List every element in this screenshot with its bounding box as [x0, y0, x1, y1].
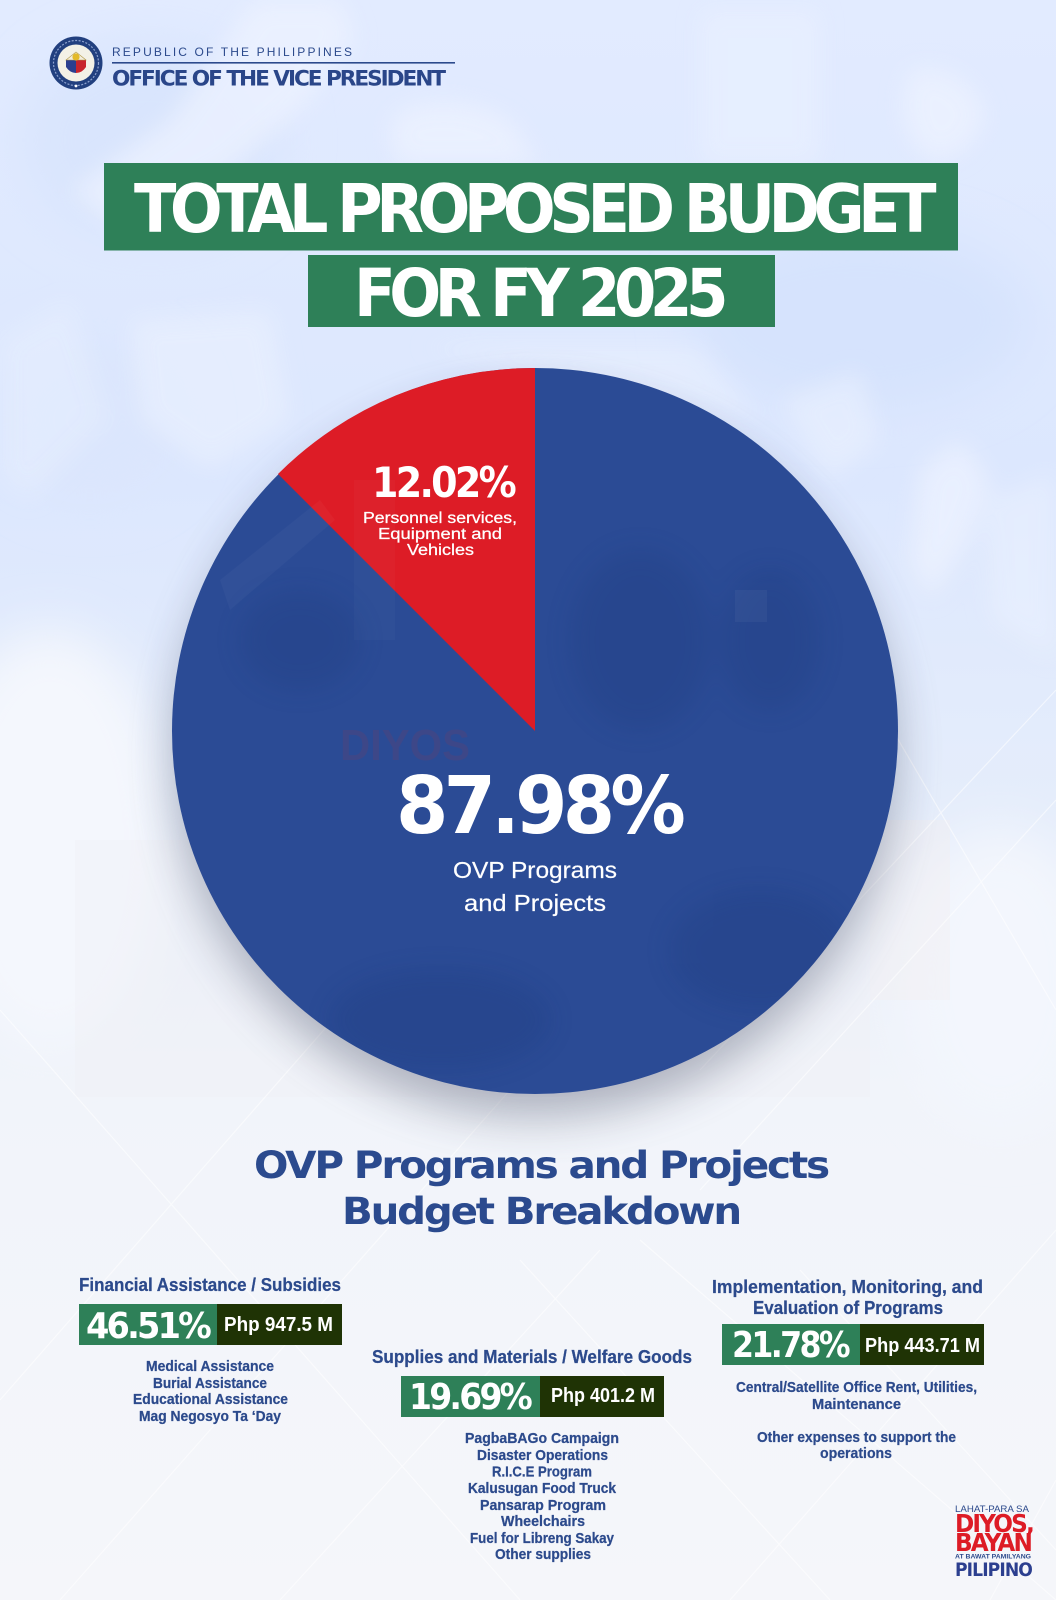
stat bar: Php 947.5 M: [224, 1314, 333, 1336]
text: Office of the Vice President: OFFICE OF THE VICE PRESIDENT: [112, 66, 447, 90]
stat bar: 46.51%: [86, 1306, 211, 1347]
list: Maintenance: [812, 1396, 901, 1413]
label: 87.98%: [396, 760, 684, 916]
heading: Evaluation of Programs: [753, 1298, 943, 1318]
title: TOTAL PROPOSED BUDGET: [134, 170, 937, 248]
heading: budget breakdown: Budget Breakdown: [342, 1190, 740, 1233]
stat bar: 19.69%: [409, 1377, 532, 1418]
list: Wheelchairs: [501, 1513, 585, 1530]
label: 12.02%: Equipment and: [378, 526, 502, 543]
title: [104, 163, 958, 332]
text: Republic of the Philippines: REPUBLIC OF THE PHILIPPINES: [112, 45, 352, 59]
heading: Supplies and Materials / Welfare Goods: [372, 1347, 692, 1367]
list: Pansarap Program: [480, 1497, 606, 1514]
icon: OVP seal: [50, 36, 102, 90]
list: Burial Assistance: [153, 1375, 267, 1392]
list: [465, 1430, 619, 1563]
stat bar: [722, 1324, 984, 1366]
list: Other supplies: [495, 1546, 591, 1563]
stat bar: Php 443.71 M: [865, 1335, 980, 1357]
panel: supplies and materials: [372, 1347, 692, 1563]
pie chart: DIYOS: [340, 721, 470, 770]
label: 12.02%: Personnel services,: [363, 510, 517, 527]
label: 12.02%: [363, 458, 517, 559]
list: Other expenses to support the: [757, 1429, 956, 1446]
list: Kalusugan Food Truck: [468, 1480, 617, 1497]
slice: Personnel services 12.02%: [278, 368, 535, 731]
header: Office of the Vice President: [50, 36, 455, 90]
heading: Implementation, Monitoring, and: [712, 1277, 983, 1297]
logo: Lahat para sa Diyos, Bayan at Bawat Pamilyang Pilipino: PILIPINO: [955, 1559, 1033, 1581]
stat bar: [401, 1376, 664, 1418]
list: [736, 1379, 977, 1462]
list: PagbaBAGo Campaign: [465, 1430, 619, 1447]
logo: Lahat para sa Diyos, Bayan at Bawat Pamilyang Pilipino: LAHAT-PARA SA: [955, 1504, 1030, 1515]
title: FOR FY 2025: [354, 255, 725, 332]
label: 12.02%: Vehicles: [407, 542, 474, 559]
logo: Lahat para sa Diyos, Bayan at Bawat Pamilyang Pilipino: AT BAWAT PAMILYANG: [955, 1554, 1031, 1560]
stat bar: [79, 1304, 342, 1347]
pie chart: [172, 368, 898, 1118]
heading: budget breakdown: [254, 1144, 829, 1233]
logo: Lahat para sa Diyos, Bayan at Bawat Pamilyang Pilipino: [955, 1504, 1033, 1581]
panel: implementation and monitoring: [712, 1277, 984, 1462]
list: operations: [820, 1445, 892, 1462]
label: 87.98%: and Projects: [464, 890, 606, 916]
logo: Lahat para sa Diyos, Bayan at Bawat Pamilyang Pilipino: DIYOS,: [955, 1509, 1033, 1538]
label: 87.98%: OVP Programs: [453, 857, 617, 883]
slice: OVP Programs and Projects 87.98%: [172, 368, 898, 1094]
heading: budget breakdown: OVP Programs and Projects: [254, 1144, 829, 1187]
list: Central/Satellite Office Rent, Utilities,: [736, 1379, 977, 1396]
list: Mag Negosyo Ta ‘Day: [139, 1408, 282, 1425]
heading: [712, 1277, 983, 1318]
list: Medical Assistance: [146, 1358, 274, 1375]
label: 87.98%: 87.98%: [396, 760, 684, 852]
list: Educational Assistance: [133, 1391, 288, 1408]
stat bar: 21.78%: [732, 1325, 850, 1366]
list: [133, 1358, 288, 1425]
list: Fuel for Libreng Sakay: [470, 1530, 615, 1547]
label: 12.02%: 12.02%: [372, 458, 516, 507]
panel: financial assistance: [79, 1275, 342, 1425]
list: Disaster Operations: [477, 1447, 608, 1464]
heading: Financial Assistance / Subsidies: [79, 1275, 341, 1295]
logo: Lahat para sa Diyos, Bayan at Bawat Pamilyang Pilipino: BAYAN: [955, 1528, 1031, 1557]
stat bar: Php 401.2 M: [551, 1385, 655, 1407]
list: R.I.C.E Program: [492, 1464, 592, 1480]
